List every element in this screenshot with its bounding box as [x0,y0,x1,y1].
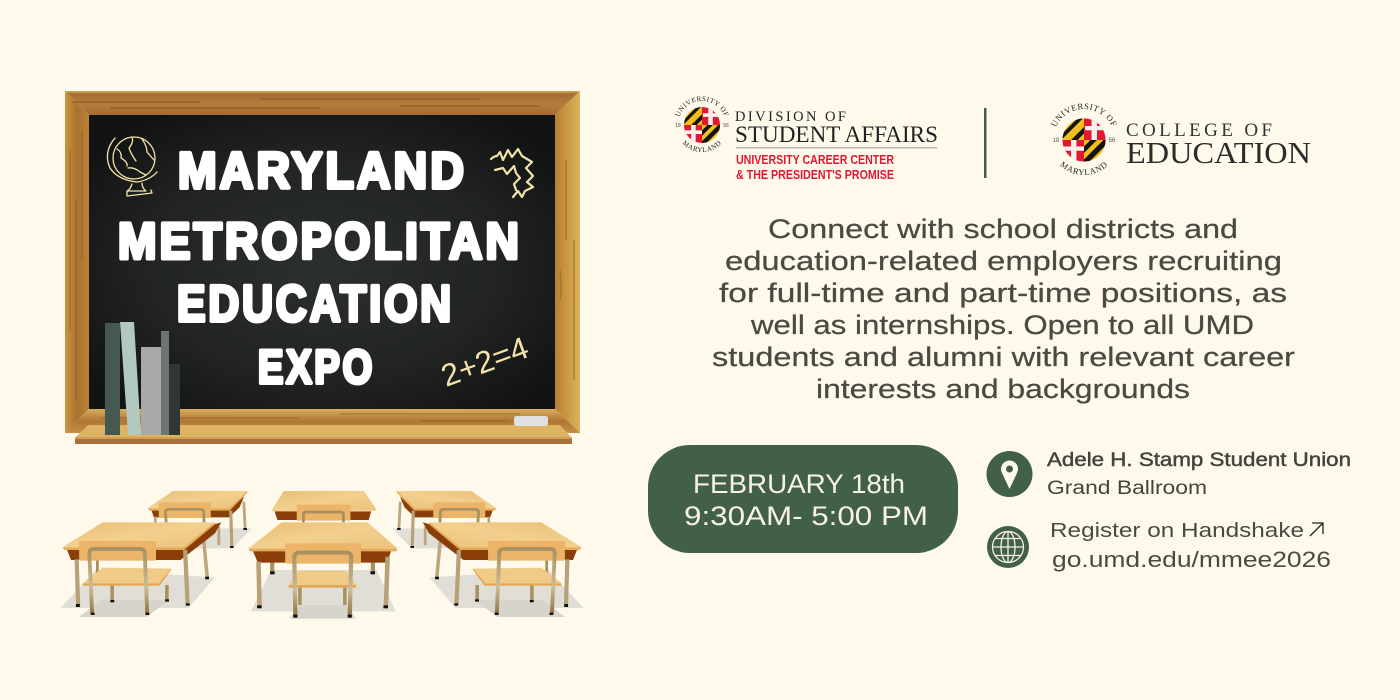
seal: MARYLAND [1060,161,1107,176]
title: METROPOLITAN [118,212,522,270]
seal: UNIVERSITY OF [1050,104,1117,126]
location text: Grand Ballroom [1047,478,1207,499]
desk: back left [148,491,252,548]
registration text: Register on Handshake [1050,519,1304,542]
chalk equation: 2+2=4 [436,330,533,394]
date and time pill: 9:30AM- 5:00 PM [684,501,928,531]
wordmark [1126,120,1311,170]
logo: Division of Student Affairs [675,96,938,182]
logo divider [984,108,986,178]
seal: 56 [723,123,729,129]
description text: students and alumni with relevant career [712,342,1295,372]
description text [712,214,1295,404]
desk: front left [61,522,221,617]
description text: interests and backgrounds [816,374,1190,404]
wordmark: & THE PRESIDENT'S PROMISE [736,168,894,182]
seal: MARYLAND [682,140,720,152]
wordmark: COLLEGE OF [1126,120,1272,141]
registration text [1050,519,1331,572]
title: EDUCATION [177,275,454,332]
location text: Adele H. Stamp Student Union [1047,450,1351,471]
wordmark [735,109,938,182]
panel: chalkboard [65,91,580,444]
desk: front centre [248,522,397,619]
description text: for full-time and part-time positions, as [719,278,1287,308]
icon: location pin [986,451,1032,497]
classroom desks [61,491,584,619]
infographic canvas [60,91,1350,619]
wordmark: STUDENT AFFAIRS [735,122,938,147]
seal: 18 [675,123,681,129]
date and time pill [648,445,958,553]
chalkboard wooden frame [65,91,580,433]
doodle: globe [107,137,157,196]
description text: Connect with school districts and [768,214,1238,244]
description text: well as internships. Open to all UMD [750,310,1254,340]
registration text: go.umd.edu/mmee2026 [1052,547,1331,572]
title: MARYLAND [178,142,467,199]
chalkboard surface [89,115,555,409]
logo: College of Education [1050,104,1311,176]
desk: front right [423,522,584,617]
seal: UNIVERSITY OF [675,96,729,116]
desk: back right [392,491,496,548]
doodle: squiggle [491,149,533,197]
books [105,322,180,435]
icon: globe [987,526,1029,568]
wordmark: UNIVERSITY CAREER CENTER [736,153,894,167]
seal [1050,104,1117,176]
wordmark: EDUCATION [1126,135,1311,170]
location text [1047,450,1351,499]
chalk ledge [75,425,572,444]
description text: education-related employers recruiting [725,246,1282,276]
wordmark: DIVISION OF [735,109,846,125]
desk: back centre [272,491,376,522]
seal: 18 [1053,138,1060,144]
icon: external link arrow [1310,523,1323,536]
date and time pill: FEBRUARY 18th [693,469,905,499]
title [118,142,522,393]
seal [675,96,729,152]
seal: 56 [1109,138,1116,144]
piece of chalk [514,416,548,426]
title: EXPO [258,340,375,393]
